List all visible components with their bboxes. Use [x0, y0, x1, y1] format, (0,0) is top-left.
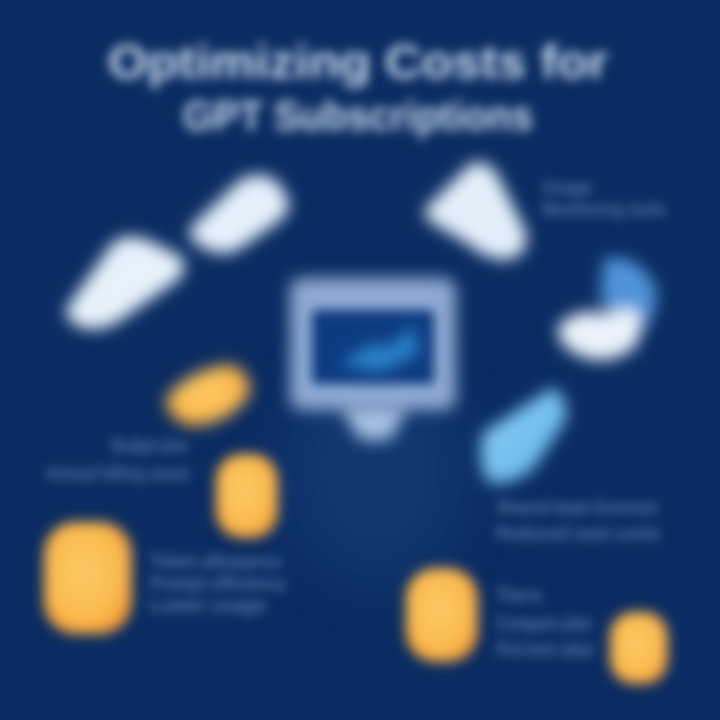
text block: bottom left: Lower usage [150, 595, 266, 617]
screen chart [340, 326, 418, 372]
text block: left middle: Budget plan [112, 435, 188, 457]
icon: gold cylinder bottom right [610, 612, 668, 684]
monitor stand [342, 406, 406, 441]
center glow [285, 360, 465, 580]
text block: top right [542, 177, 666, 221]
title: Optimizing Costs for [108, 35, 608, 88]
icon: blue diamond [481, 388, 566, 483]
text block: right middle [496, 497, 660, 545]
icon: gold coin flat [166, 364, 250, 426]
text block: left middle [46, 435, 190, 485]
text block: bottom left [150, 551, 287, 617]
monitor frame [290, 278, 456, 410]
text block: bottom left: Token allowance [150, 551, 282, 573]
monitor [290, 278, 456, 441]
text block: bottom right: Compare plan [496, 613, 592, 635]
icon: gold cylinder large left [44, 522, 132, 634]
icon: gold cylinder center right [406, 568, 478, 662]
monitor screen [312, 310, 434, 384]
icon: right cloud with blue back [558, 258, 656, 360]
text block: top right: Monitoring tools [542, 199, 666, 221]
icon: left lower cloud [66, 237, 185, 329]
title [108, 35, 608, 139]
text block: right middle: Shared team licenses [496, 497, 658, 519]
text block: bottom left: Prompt efficiency [150, 573, 287, 595]
text block: right middle: Reduced seat costs [496, 523, 660, 545]
title: GPT Subscriptions [183, 92, 533, 139]
text block: bottom right [496, 585, 594, 661]
icon: right upper cloud [424, 162, 527, 260]
text block: bottom right: Pick best value [496, 639, 594, 661]
icon: gold cylinder mid [216, 454, 278, 538]
text block: bottom right: Tiers [496, 585, 542, 607]
icon: left upper cloud [190, 175, 289, 254]
text block: left middle: Annual billing saves [46, 463, 190, 485]
text block: top right: Usage [542, 177, 592, 199]
